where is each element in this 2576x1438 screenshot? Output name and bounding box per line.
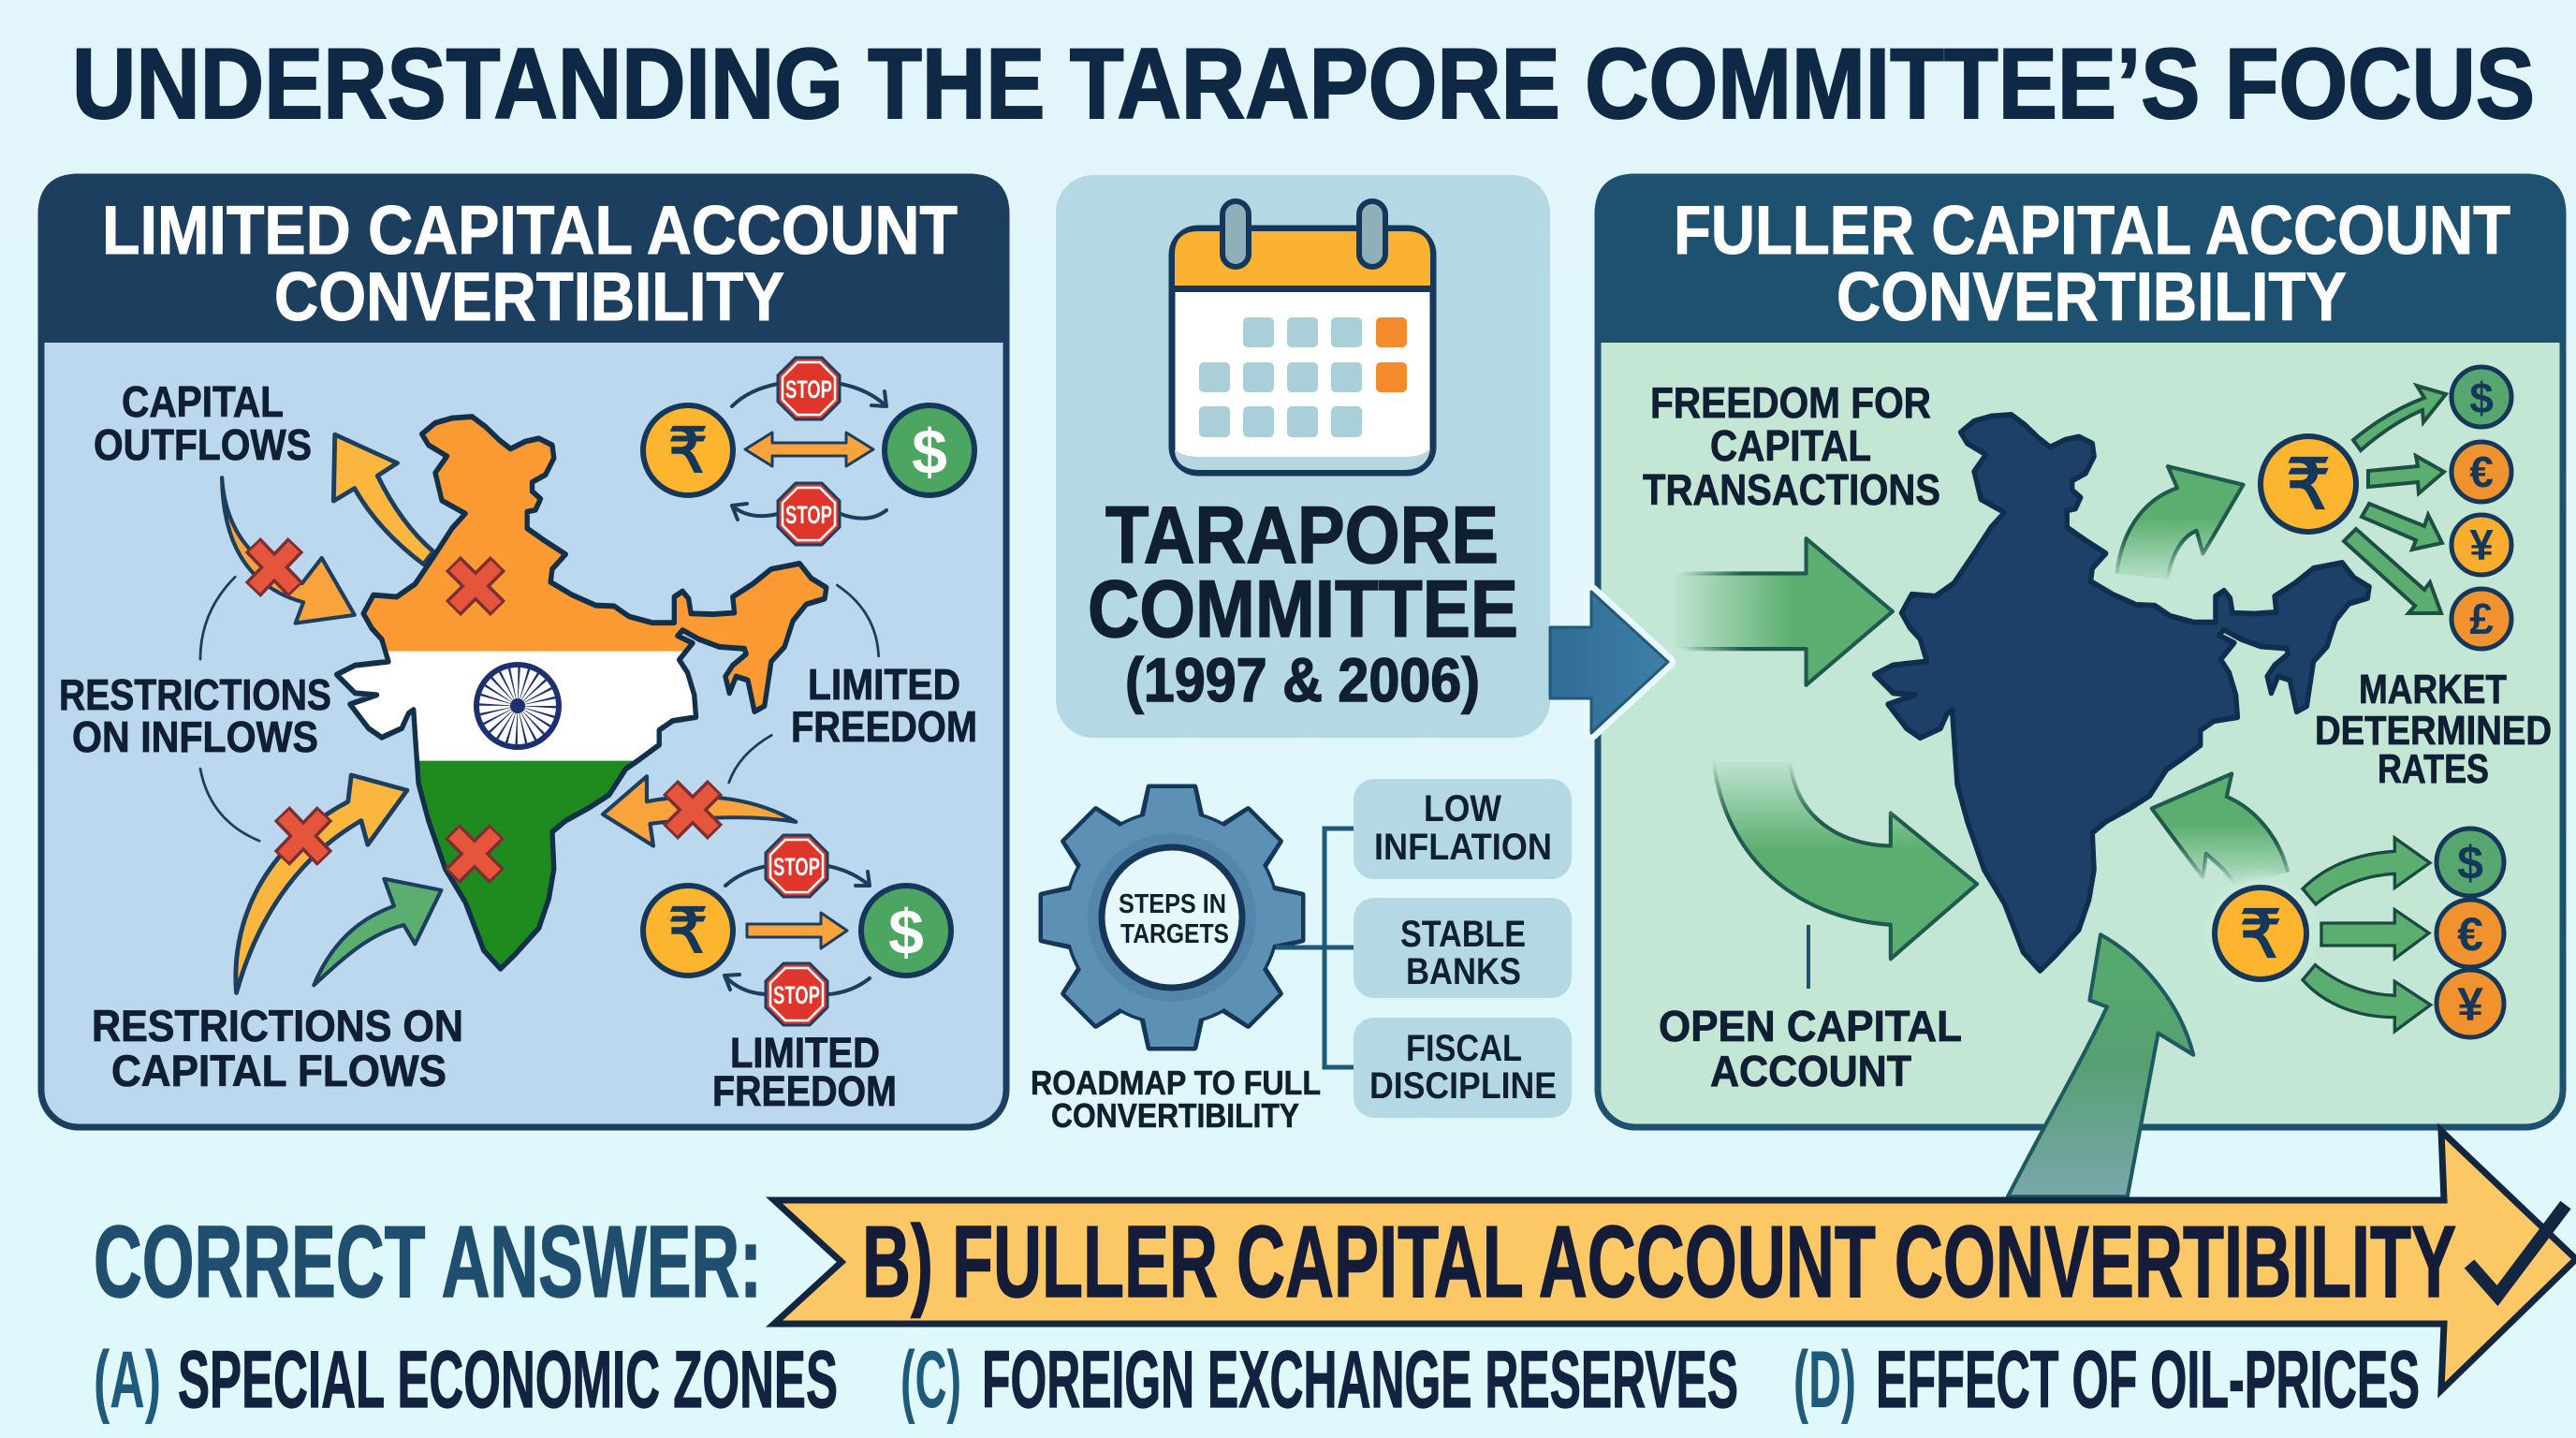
icon: Ashoka chakra <box>476 665 559 747</box>
icon: upper rupee coin <box>2261 436 2356 532</box>
icon: dollar coin lower <box>2437 829 2504 896</box>
label: limited freedom lower: LIMITED <box>730 1029 880 1077</box>
box: fiscal discipline <box>1354 1018 1572 1118</box>
option C <box>900 1335 1738 1425</box>
arrow: blocked orange flow upper left <box>222 477 355 624</box>
icon: stop sign top <box>766 835 827 897</box>
panel background <box>41 177 1006 1127</box>
icon: yen coin small: ¥ <box>2469 521 2494 569</box>
box: stable banks: BANKS <box>1406 951 1521 992</box>
icon: calendar <box>1172 201 1433 473</box>
label: limited freedom lower: FREEDOM <box>712 1067 897 1115</box>
label: roadmap to full convertibility: ROADMAP TO FULL <box>1031 1064 1321 1102</box>
connector line to label <box>1807 925 1810 989</box>
arrow: committee to fuller convertibility <box>1550 592 1668 733</box>
icon: euro coin small: € <box>2469 448 2494 496</box>
icon: lower currency arrows <box>2303 838 2431 1032</box>
icon: two-way orange arrow <box>745 433 873 466</box>
answer banner arrow <box>774 1131 2576 1390</box>
arrow: green inflow <box>314 879 441 985</box>
icon: pound coin small: £ <box>2469 594 2494 643</box>
arrow: curved green inflow from lower rupee <box>2152 773 2288 886</box>
panel heading: LIMITED CAPITAL ACCOUNT <box>102 193 958 269</box>
option A: SPECIAL ECONOMIC ZONES <box>178 1335 838 1425</box>
icon: dollar coin small: $ <box>2469 374 2494 422</box>
label: capital outflows: OUTFLOWS <box>94 420 312 469</box>
label: restrictions on capital flows <box>92 1001 463 1095</box>
box: stable banks: STABLE <box>1400 914 1526 955</box>
box: low inflation: LOW <box>1424 788 1501 829</box>
panel heading: CONVERTIBILITY <box>1837 259 2347 335</box>
option D: (D) <box>1793 1335 1856 1425</box>
panel heading <box>1674 193 2510 335</box>
icon: curved flow arrows <box>732 384 886 520</box>
arrow: straight green inflow <box>1675 538 1893 685</box>
arrow: blocked yellow inflow lower left <box>236 775 407 992</box>
icon: upper rupee coin: ₹ <box>2286 446 2331 523</box>
icon: dollar coin: $ <box>888 897 924 968</box>
icon: rupee coin: ₹ <box>668 896 708 965</box>
icon: stop sign top <box>778 358 840 419</box>
icon: euro coin lower <box>2437 900 2504 967</box>
label: capital outflows <box>94 377 312 469</box>
icon: euro coin small <box>2452 442 2511 502</box>
icon: dollar coin: $ <box>912 417 947 488</box>
icon: red cross marks <box>253 545 715 876</box>
label: limited freedom upper: LIMITED <box>808 660 960 709</box>
label: limited freedom upper <box>791 660 977 751</box>
icon: stop sign bottom <box>766 963 827 1025</box>
icon: rupee coin <box>643 886 733 976</box>
label: roadmap to full convertibility <box>1031 1064 1321 1135</box>
icon: lower rupee coin: ₹ <box>2240 898 2281 971</box>
label: freedom for capital transactions: TRANSACTIONS <box>1643 465 1940 514</box>
label: market determined rates: MARKET <box>2359 667 2507 712</box>
icon: one-way orange arrow <box>747 913 847 948</box>
icon: check mark <box>2469 1205 2566 1296</box>
label: restrictions on inflows <box>59 670 331 761</box>
label: restrictions on capital flows: CAPITAL FLOWS <box>111 1046 446 1095</box>
committee name and years: TARAPORE <box>1105 491 1499 580</box>
label: roadmap to full convertibility: CONVERTIBILITY <box>1051 1096 1299 1135</box>
icon: gear with steps in targets: TARGETS <box>1120 919 1229 949</box>
label: open capital account <box>1659 1002 1962 1095</box>
icon: curved flow arrows <box>724 866 870 994</box>
panel heading <box>102 193 958 335</box>
icon: stop sign top: STOP <box>785 375 832 404</box>
map: India in navy <box>1875 415 2369 971</box>
icon: dollar coin small <box>2452 367 2511 427</box>
option C: (C) <box>900 1335 961 1425</box>
panel background <box>1598 177 2563 1127</box>
icon: stop sign bottom: STOP <box>773 981 820 1009</box>
exchange diagram: upper rupee to dollar with stops <box>643 358 974 545</box>
label: market determined rates <box>2315 667 2552 792</box>
label: restrictions on inflows: RESTRICTIONS <box>59 670 331 719</box>
label: capital outflows: CAPITAL <box>122 377 284 426</box>
label: restrictions on capital flows: RESTRICTIONS ON <box>92 1001 463 1050</box>
label: freedom for capital transactions <box>1643 378 1940 514</box>
icon: gear with steps in targets: STEPS IN <box>1119 889 1226 919</box>
label: restrictions on inflows: ON INFLOWS <box>72 712 318 761</box>
thin bracket curves <box>200 577 879 841</box>
label: limited freedom upper: FREEDOM <box>791 702 977 751</box>
icon: gear with steps in targets <box>1042 787 1302 1048</box>
map: India in tricolour <box>334 414 829 972</box>
icon: dollar coin <box>885 405 974 495</box>
label: open capital account: OPEN CAPITAL <box>1659 1002 1962 1050</box>
label: limited freedom lower <box>712 1029 897 1115</box>
box: low inflation: INFLATION <box>1374 827 1552 868</box>
icon: yen coin lower: ¥ <box>2457 978 2483 1031</box>
arrow: big green arrow rising from answer banner <box>2008 934 2193 1196</box>
option A <box>94 1335 838 1425</box>
label: open capital account: ACCOUNT <box>1710 1047 1911 1095</box>
box: stable banks <box>1354 898 1572 998</box>
icon: rupee coin: ₹ <box>668 416 708 485</box>
correct answer label: CORRECT ANSWER: <box>94 1205 762 1319</box>
icon: dollar coin lower: $ <box>2457 837 2483 889</box>
option D <box>1793 1335 2420 1425</box>
box: fiscal discipline: FISCAL <box>1406 1028 1522 1069</box>
connector: gear to target boxes <box>1276 829 1354 1067</box>
panel header band <box>1598 177 2563 339</box>
label: market determined rates: RATES <box>2378 746 2489 792</box>
icon: stop sign top: STOP <box>773 853 820 881</box>
option A: (A) <box>94 1335 161 1425</box>
option C: FOREIGN EXCHANGE RESERVES <box>982 1335 1738 1425</box>
committee name and years: COMMITTEE <box>1088 565 1518 654</box>
icon: yen coin lower <box>2437 970 2504 1037</box>
icon: upper currency arrows <box>2344 386 2446 613</box>
icon: dollar coin <box>861 886 951 976</box>
committee name and years: (1997 & 2006) <box>1125 645 1480 714</box>
icon: lower rupee coin <box>2215 888 2306 979</box>
icon: stop sign bottom: STOP <box>785 501 832 529</box>
label: freedom for capital transactions: FREEDOM FOR <box>1650 378 1931 427</box>
icon: stop sign bottom <box>778 483 840 545</box>
arrow: blocked orange inflow right <box>603 776 796 846</box>
panel heading: CONVERTIBILITY <box>274 259 784 335</box>
icon: rupee coin <box>643 405 733 495</box>
panel: limited capital account convertibility <box>41 177 1006 1127</box>
panel header band <box>41 177 1006 339</box>
arrow: curved green inflow <box>1713 762 1977 959</box>
icon: pound coin small <box>2452 589 2511 649</box>
arrow: curved green outflow to rupee <box>2116 466 2244 580</box>
box: low inflation <box>1354 779 1572 879</box>
icon: euro coin lower: € <box>2457 908 2483 961</box>
arrow: capital outflows <box>333 434 433 565</box>
box: fiscal discipline: DISCIPLINE <box>1369 1065 1557 1107</box>
committee card background <box>1056 175 1550 738</box>
committee name and years <box>1088 491 1518 714</box>
exchange diagram: lower rupee to dollar with stops <box>643 835 951 1025</box>
icon: yen coin small <box>2452 515 2511 575</box>
icon: glow behind lower rupee coin <box>2195 868 2326 999</box>
panel: Tarapore Committee <box>1056 175 1550 738</box>
panel: fuller capital account convertibility <box>1598 177 2563 1127</box>
label: freedom for capital transactions: CAPITAL <box>1710 421 1871 470</box>
